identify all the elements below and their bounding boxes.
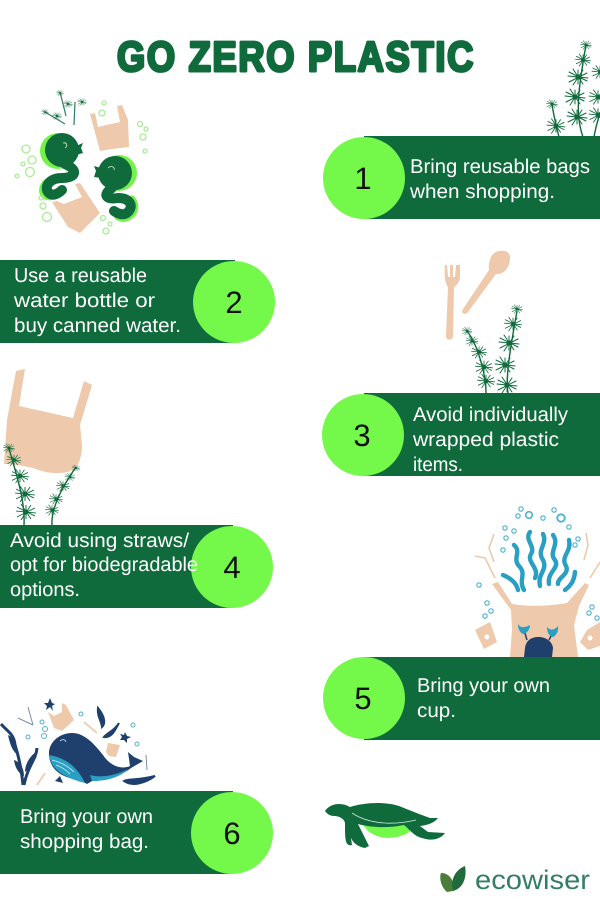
logo: ecowiser: ecowiser [475, 865, 590, 895]
illustration: seaweed above step 3 [462, 305, 522, 393]
step 3 text: Avoid individually [413, 404, 568, 426]
step 1 banner: 1 [354, 161, 372, 196]
illustration: seaweed top right [546, 41, 600, 137]
step 6 banner: 6 [223, 816, 241, 851]
step 5 banner [323, 657, 600, 740]
bag [48, 703, 74, 731]
twigs [18, 707, 147, 770]
step 5 banner: 5 [354, 681, 372, 716]
step 3 banner: 3 [353, 418, 371, 453]
step 3 text: items. [413, 454, 463, 476]
kelp [1, 724, 37, 785]
step 3 banner [322, 393, 600, 476]
step 5 text: cup. [417, 700, 456, 722]
number badge 1 [323, 137, 405, 219]
number badge 3 [322, 394, 404, 476]
cup [106, 743, 120, 757]
number badge 2 [193, 261, 275, 343]
step 2 text: buy canned water. [14, 315, 181, 337]
cups [475, 622, 497, 649]
step 6 text: Bring your own [20, 806, 153, 828]
step 6 text: shopping bag. [20, 831, 149, 853]
illustration: turtle [325, 803, 445, 848]
number badge 5 [323, 657, 405, 739]
crab [524, 637, 553, 657]
step 4 text: options. [10, 579, 80, 601]
starfish [44, 698, 55, 711]
number badge 6 [191, 792, 273, 874]
illustration: large plastic bag with seaweed [4, 369, 92, 525]
step 6 banner [0, 791, 273, 874]
step 4 banner: 4 [223, 550, 241, 585]
seahorse left [40, 133, 76, 169]
bubbles [15, 101, 148, 234]
step 5 text: Bring your own [417, 675, 550, 697]
illustration: seahorses and bags [15, 90, 148, 234]
bag [492, 582, 589, 657]
step 2 banner: 2 [225, 285, 243, 320]
step 2 banner [0, 260, 275, 343]
seahorse right [101, 155, 137, 191]
illustration: fork and spoon [445, 251, 510, 340]
step 4 text: opt for biodegradable [10, 554, 198, 576]
step 4 banner [0, 525, 273, 608]
step 2 text: Use a reusable [14, 265, 147, 287]
illustration: whale with litter [1, 698, 155, 785]
number badge 4 [191, 526, 273, 608]
bag top [90, 105, 129, 151]
illustration: bag, coral, crab and cups [475, 507, 600, 657]
bag bottom [52, 183, 100, 233]
bubbles [519, 507, 523, 511]
whale [49, 733, 143, 784]
step 3 text: wrapped plastic [412, 429, 559, 451]
step 4 text: Avoid using straws/ [10, 530, 189, 552]
step 1 text: Bring reusable bags [410, 156, 590, 178]
step 1 banner [323, 136, 600, 219]
leaf icon [440, 873, 453, 892]
bag fragments [475, 533, 600, 578]
bubbles [26, 712, 139, 746]
step 2 text: water bottle or [13, 290, 155, 312]
small fin and spoon [55, 776, 63, 783]
step 1 text: when shopping. [409, 181, 555, 203]
blue seaweed [503, 532, 575, 590]
title: GO ZERO PLASTIC [117, 33, 475, 80]
seaweed sprigs [45, 92, 75, 125]
